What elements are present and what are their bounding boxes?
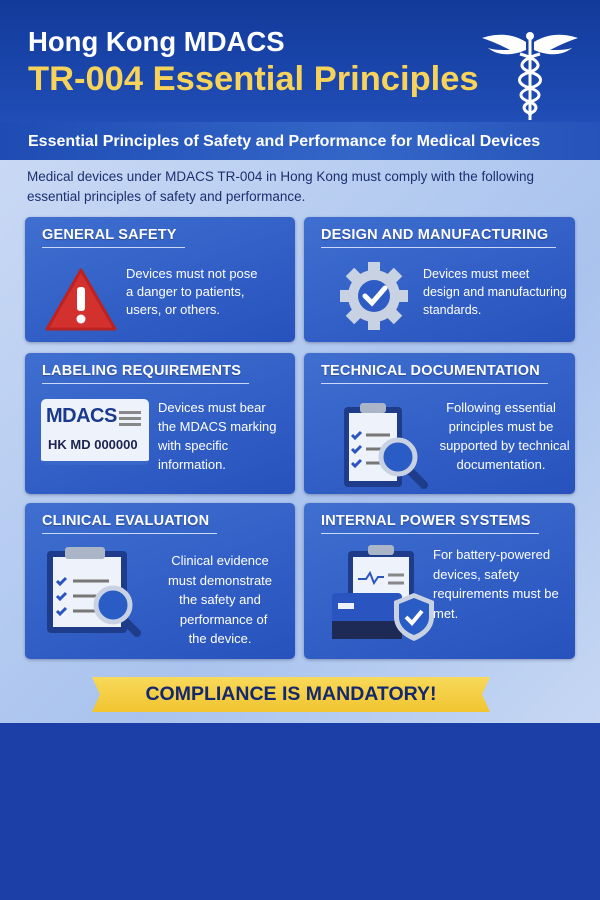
panel: technical documentation xyxy=(304,353,575,494)
panel: general safety: GENERAL SAFETY xyxy=(42,227,177,243)
panel: labeling requirements: with specific xyxy=(158,438,228,453)
panel: internal power systems: INTERNAL POWER SYSTEMS xyxy=(321,513,531,529)
panel: technical documentation: documentation. xyxy=(457,457,545,472)
icon: MDACS label: MDACS xyxy=(46,405,117,427)
panel: general safety: a danger to patients, xyxy=(126,284,245,299)
panel: technical documentation: TECHNICAL DOCUMENTATION xyxy=(321,363,540,379)
panel: internal power systems: For battery-powered xyxy=(433,547,550,562)
panel: technical documentation: principles must be xyxy=(449,419,553,434)
panel: internal power systems: met. xyxy=(433,606,458,620)
panel: clinical evaluation: the safety and xyxy=(179,592,261,607)
panel: general safety: Devices must not pose xyxy=(126,266,258,281)
subtitle band: Essential Principles of Safety and Performance for Medical Devices xyxy=(28,133,540,150)
icon: MDACS label xyxy=(41,399,149,465)
icon: clipboard magnifier xyxy=(47,547,141,637)
panel: internal power systems xyxy=(304,503,575,659)
panel: labeling requirements: Devices must bear xyxy=(158,400,266,415)
icon: clipboard magnifier xyxy=(344,403,428,489)
callout: compliance banner: COMPLIANCE IS MANDATORY! xyxy=(145,683,437,705)
intro text: Medical devices under MDACS TR-004 in Hong Kong must comply with the following essential principles of safety and performance. xyxy=(27,169,534,204)
icon: MDACS label: HK MD 000000 xyxy=(48,437,138,452)
icon: battery shield xyxy=(332,545,434,641)
panel: design and manufacturing xyxy=(304,217,575,342)
panel: internal power systems: requirements must be xyxy=(433,586,559,601)
panel: clinical evaluation: performance of xyxy=(180,612,267,626)
icon: gear check xyxy=(340,262,408,330)
panel: general safety xyxy=(25,217,295,342)
title: TR-004 Essential Principles xyxy=(28,60,479,98)
panel: design and manufacturing: standards. xyxy=(423,303,481,317)
panel: labeling requirements: information. xyxy=(158,457,226,472)
panel: labeling requirements xyxy=(25,353,295,494)
icon: caduceus xyxy=(482,32,578,120)
panel: clinical evaluation xyxy=(25,503,295,659)
callout: compliance banner xyxy=(92,677,490,712)
panel: clinical evaluation: the device. xyxy=(189,631,251,646)
panel: clinical evaluation: CLINICAL EVALUATION xyxy=(42,513,209,529)
panel: technical documentation: supported by technical xyxy=(440,438,570,453)
panel: technical documentation: Following essential xyxy=(446,400,556,415)
light content background xyxy=(0,160,600,723)
panel: design and manufacturing: Devices must meet xyxy=(423,267,529,281)
title: Hong Kong MDACS xyxy=(28,26,285,57)
panel: internal power systems: devices, safety xyxy=(433,566,519,582)
header background xyxy=(0,0,600,160)
panel: labeling requirements: LABELING REQUIREMENTS xyxy=(42,363,241,379)
icon: warning triangle xyxy=(46,268,117,330)
panel: design and manufacturing: design and manufacturing xyxy=(423,285,567,299)
panel: labeling requirements: the MDACS marking xyxy=(158,419,276,434)
panel: design and manufacturing: DESIGN AND MANUFACTURING xyxy=(321,227,548,243)
subtitle band xyxy=(0,122,600,160)
panel: clinical evaluation: Clinical evidence xyxy=(171,553,269,568)
title xyxy=(28,26,479,98)
panel: clinical evaluation: must demonstrate xyxy=(168,572,272,588)
panel: general safety: users, or others. xyxy=(126,302,220,317)
